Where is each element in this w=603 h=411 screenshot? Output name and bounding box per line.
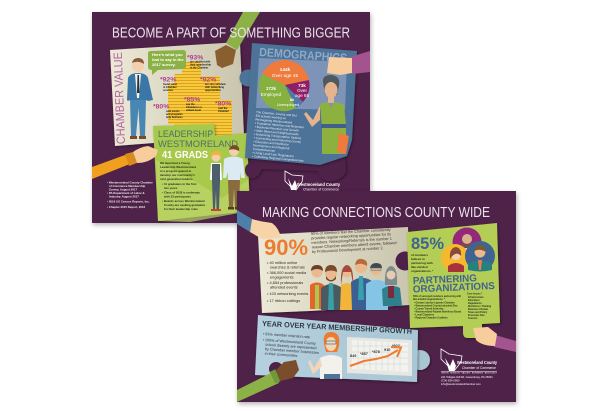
list: other issues: Taxes and Policy: [468, 311, 488, 314]
list: networking figures: [267, 260, 308, 303]
stat: 93%: their membership: [190, 64, 211, 66]
heading: partnering organizations: [413, 273, 495, 295]
list: other issues: Economic Dev.: [468, 314, 485, 317]
page 2: making connections county wide: [237, 191, 516, 402]
stat: 80% left: help business: [166, 116, 183, 119]
panel: chamber value: [110, 42, 244, 146]
logo: page 2 chamber: info@westmorelandchamber.com: [441, 382, 482, 386]
text block: networking description: by Professional Development at number 2.: [312, 246, 384, 254]
icon: graduate man: [223, 145, 245, 210]
stat: 80% right: Chamber: [218, 110, 229, 113]
stat: 80% right: *80%: [215, 100, 231, 108]
text block: partnering description: of members: [411, 253, 428, 257]
chart: membership growth line: [347, 337, 412, 376]
stat: 80% left: and programs: [166, 113, 183, 116]
text block: page 1 bottom-left bullets: Industry, August 2017: [109, 194, 139, 198]
list: partner organizations: • Local Chambers: [414, 314, 435, 316]
stat: 92% right: [200, 76, 226, 92]
icon: left hand with orange sleeve: [92, 146, 158, 179]
list: other issues: Regulations: [468, 302, 482, 305]
text block: networking description: 90% of members feel the Chamber consistently: [311, 228, 391, 236]
list: other issues: Infrastructure: [468, 296, 484, 299]
heading: partnering organizations: ORGANIZATIONS: [413, 281, 495, 295]
text block: demographics description: • Enhancing Transportation Options: [254, 132, 302, 140]
chart: membership growth line: *878: [372, 350, 380, 354]
stat: 85%: *85%: [184, 96, 200, 104]
list: networking figures: • 4,654 professionals: [267, 280, 303, 285]
text block: leadership description: • Boards across Westmoreland: [162, 199, 205, 203]
icon: three people in circles: [441, 228, 495, 272]
chart: demographics pie: Over: [297, 88, 307, 93]
list: networking figures: • 17 ribbon cuttings: [267, 298, 300, 303]
stat: 92% left: *92%: [160, 76, 176, 84]
icon: right hand with pink sleeve: [327, 51, 370, 75]
chart: demographics pie: 8k: [290, 97, 295, 102]
chart: demographics pie: Over age 45: [272, 73, 299, 79]
stat: 80% right: said the: [218, 107, 228, 110]
text block: demographics description: The Chamber, County and Del.: [256, 110, 298, 118]
icon: woman in green dress: [304, 75, 349, 154]
icon: stacks of gold coins: [168, 62, 232, 136]
callout: survey speech bubble: 2017 survey.: [152, 62, 176, 67]
heading: partnering organizations: PARTNERING: [413, 273, 477, 287]
icon: bottom-right hand with pink sleeve: [473, 327, 516, 352]
stat: 93%: are satisfied with: [190, 60, 211, 64]
stat: 92% left: found value: [163, 83, 178, 86]
list: networking figures: attended events: [270, 284, 298, 290]
icon: top-left hand with blue sleeve: [237, 210, 281, 239]
text block: membership bullets: school districts are represented: [265, 343, 317, 350]
list: other issues: Business Climate: [468, 308, 489, 311]
list: partner organizations: like-minded organizations: *: [413, 298, 445, 301]
list: partner organizations: • Regional Chamber Coalition: [414, 316, 448, 320]
heading: membership growth: YEAR OVER YEAR MEMBERSHIP GROWTH: [262, 319, 412, 336]
list: other issues: Education: [468, 299, 480, 302]
text block: leadership description: next generation leaders.: [160, 177, 193, 181]
text block: leadership description: Leadership Westmoreland: [160, 165, 196, 169]
logo: page 2 chamber: [441, 349, 498, 386]
stat: 80% right: [215, 100, 231, 113]
stat: 90%: 90%: [264, 235, 308, 260]
text block: membership bullets: in their communities: [265, 352, 298, 358]
stat: 85%: 85%: [411, 234, 444, 253]
puzzle tab: page 1 cutout: [245, 155, 346, 181]
page 1: become a part of something bigger: [92, 12, 370, 223]
panel: partnering organizations: [407, 223, 500, 338]
list: other issues: [467, 292, 492, 320]
text block: partnering description: organizations. *: [411, 269, 434, 273]
heading: leadership westmoreland: LEADERSHIP: [158, 129, 213, 139]
text block: leadership description: We launched a Young: [160, 161, 190, 165]
stat: 92% right: with networking: [205, 86, 224, 89]
callout: survey speech bubble: had to say in the: [152, 57, 184, 62]
callout: survey speech bubble: [148, 50, 186, 75]
text block: partnering description: [411, 253, 434, 273]
stat: 41 grads: 41 GRADS: [162, 149, 208, 161]
list: networking figures: searches & referrals: [270, 264, 305, 270]
list: partner organizations: • Westmoreland County Industrial Dev.: [414, 304, 458, 308]
callout: survey speech bubble: Here's what you: [152, 52, 183, 57]
text block: page 1 bottom-left bullets: of Commerce Membership: [109, 184, 146, 188]
text block: demographics description: • Business Retention and Growth: [255, 125, 299, 133]
list: networking figures: • 103 networking events: [267, 291, 308, 296]
list: networking figures: engagements: [270, 274, 294, 280]
list: other issues: Workforce / Training: [468, 305, 492, 308]
text block: membership bullets: • 100% of Westmoreland County: [263, 338, 316, 346]
text block: leadership description: for their leadership roles: [164, 207, 198, 211]
chart: membership growth line: 910: [384, 348, 390, 352]
text block: membership bullets: • 91% member retention rate: [263, 332, 310, 339]
text block: leadership description: develop our community's: [160, 173, 195, 177]
text block: membership bullets: [262, 332, 320, 359]
stat: 93%: *93%: [187, 54, 203, 62]
text block: networking description: [311, 228, 397, 254]
text block: page 1 bottom-left bullets: [107, 180, 154, 209]
stat: 92% right: are very satisfied: [205, 83, 226, 86]
stat: 85%: Chamber is a: [186, 106, 202, 109]
text block: demographics description: Competitiveness: [253, 147, 276, 153]
title: page 2: MAKING CONNECTIONS COUNTY WIDE: [262, 205, 490, 221]
stat: 80% left: *80%: [153, 104, 169, 110]
text block: leadership description: • Class of 2018 is underway: [162, 190, 200, 194]
text block: leadership description: in a program geared to: [160, 169, 192, 173]
chart: demographics pie: Unemployed: [277, 102, 299, 107]
chart: demographics pie: 144k: [280, 67, 291, 73]
text block: leadership description: • 41 graduates in the first: [162, 182, 196, 186]
stat: 85%: say the: [186, 103, 195, 106]
panel: leadership westmoreland: [153, 124, 250, 222]
icon: woman with red hair and glasses: [308, 332, 342, 379]
text block: leadership description: with 23 participants: [163, 194, 191, 198]
text block: partnering description: believe in: [411, 257, 425, 261]
text block: demographics description: • Main Street and Neighborhoods: [254, 128, 299, 136]
logo: page 2 chamber: Chamber of Commerce: [462, 366, 496, 370]
text block: demographics description: [252, 110, 308, 163]
chart: demographics pie: Employed: [261, 92, 282, 97]
list: other issues: Tourism: [468, 317, 477, 320]
text block: demographics description: • Cultivating Regional Competitiveness: [252, 154, 304, 163]
heading: chamber value: CHAMBER VALUE: [111, 52, 128, 144]
chart: membership growth line: *922: [392, 344, 400, 348]
list: partner organizations: [413, 295, 462, 320]
list: networking figures: • 40 million online: [267, 260, 297, 265]
title: page 1: BECOME A PART OF SOMETHING BIGGER: [112, 24, 350, 42]
text block: demographics description: ED actively working on: [256, 114, 286, 120]
chart: demographics pie: 73k: [298, 83, 306, 88]
text block: networking description: provides regular networking opportunities for its: [311, 232, 391, 240]
text block: page 1 bottom-left bullets: • Chapter 2015 Report, 2016: [107, 205, 146, 209]
chart: membership growth line: 849: [350, 354, 356, 358]
icon: bottom-left hand with green sleeve: [237, 360, 299, 402]
text block: page 1 bottom-left bullets: • Westmoreland County Chamber: [107, 180, 154, 184]
text block: membership bullets: by Chamber member businesses: [265, 347, 319, 355]
stat: 92% left: services: [163, 89, 174, 92]
stat: 85%: valued asset: [186, 109, 201, 112]
logo: page 1 chamber: Chamber of Commerce: [303, 188, 339, 192]
stat: 92% left: in Chamber: [163, 86, 177, 89]
text block: leadership description: [160, 161, 206, 211]
text block: networking description: members. Networking/Referrals is the number 1: [311, 237, 392, 245]
panel: 90 percent networking: [258, 227, 414, 313]
logo: page 2 chamber: (724) 834-2900: [441, 378, 460, 382]
text block: demographics description: • Education and Workforce: [253, 139, 289, 147]
text block: networking description: reason Chamber members attend events, followed: [312, 241, 397, 249]
stat: 80% left: [153, 104, 183, 119]
logo: page 1 chamber: Westmoreland County: [297, 182, 340, 188]
text block: page 1 bottom-left bullets: • PA Department of Labor &: [107, 191, 145, 195]
panel: demographics: [240, 43, 357, 165]
icon: businessman: [127, 58, 153, 139]
stat: 92% right: *92%: [200, 76, 216, 84]
panel: leadership westmoreland: WESTMORELAND: [158, 139, 239, 149]
text block: page 1 bottom-left bullets: Survey, August 2017: [109, 188, 138, 192]
logo: page 2 chamber: VISION · MISSION · VALUES · BUSINESS · ADVOCACY: [441, 372, 498, 374]
text block: partnering description: like-minded: [411, 265, 428, 269]
text block: demographics description: • Population Attraction and Retention: [255, 121, 304, 129]
panel: year over year membership growth: [255, 315, 430, 382]
logo: page 2 chamber: 241 Tollgate Hill Rd, Greensburg, PA 15601: [441, 375, 493, 379]
icon: top hand with green sleeve: [215, 12, 260, 68]
list: partner organizations: • Westmoreland-Fayette Workforce Board: [414, 310, 462, 314]
list: partner organizations: • County Transit Authority: [414, 308, 444, 310]
text block: page 1 bottom-left bullets: • 2016 US Census Reports, Inc.: [107, 200, 150, 204]
stat: 85%: [184, 96, 202, 112]
list: partner organizations: • Greater Latrobe-Ligonier Chamber: [414, 302, 455, 304]
list: partner organizations: 59% of surveyed members partnering with: [413, 295, 462, 298]
chart: demographics pie: 172k: [266, 86, 277, 91]
heading: demographics: DEMOGRAPHICS: [259, 45, 348, 65]
text block: leadership description: two years: [164, 186, 178, 190]
chart: membership growth line: *857: [360, 352, 368, 356]
stat: 93%: [187, 54, 211, 70]
stat: 92% right: opportunities: [205, 89, 222, 92]
chart: demographics pie: [259, 60, 310, 111]
list: other issues: Core Issues *: [467, 292, 482, 296]
text block: leadership description: County are seeking graduates: [164, 203, 206, 207]
text block: demographics description: • Connecting and Improving County: [254, 136, 302, 144]
logo: page 1 chamber: [285, 171, 340, 192]
icon: graduate woman: [210, 151, 222, 211]
list: networking figures: • 366,000 social media: [267, 270, 307, 275]
text block: partnering description: partnering with: [411, 261, 433, 265]
stat: 80% left: said events: [166, 110, 180, 113]
chart: demographics pie: age 65: [295, 93, 309, 98]
text block: demographics description: Development and Regional: [253, 143, 290, 150]
icon: group of five professionals: [310, 259, 402, 310]
text block: demographics description: • Living Local Law, Regulations: [252, 151, 294, 158]
text block: demographics description: Reimagining Westmoreland: [255, 117, 293, 125]
logo: page 2 chamber: Westmoreland County: [457, 360, 497, 366]
stat: 93%: in the Chamber: [190, 66, 208, 70]
stat: 92% left: [160, 76, 178, 92]
